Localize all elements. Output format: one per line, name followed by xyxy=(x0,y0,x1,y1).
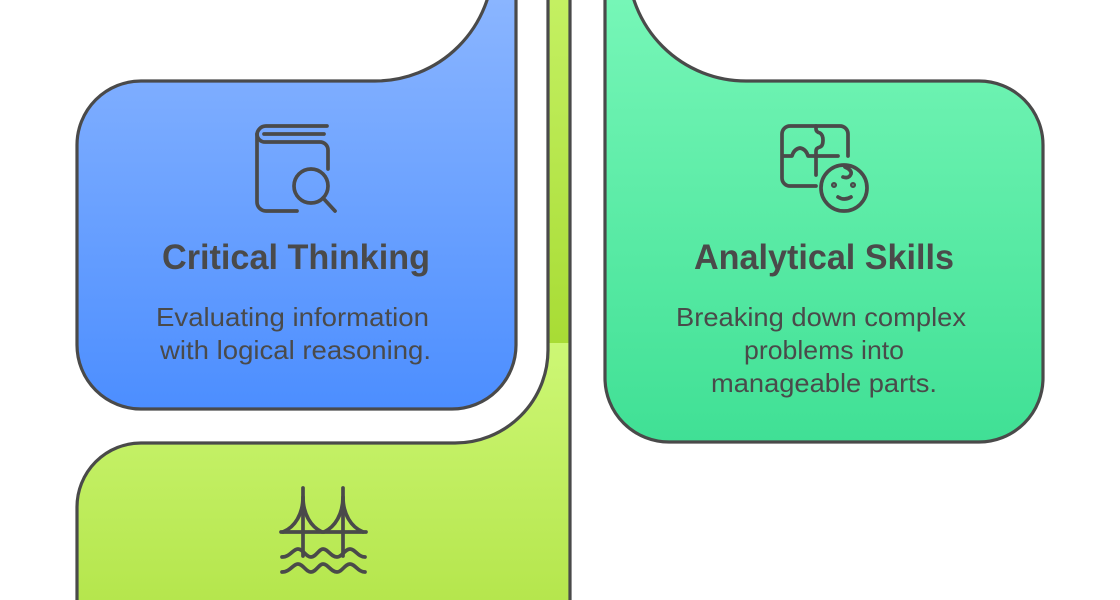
text: analytical skills description: Breaking down complex xyxy=(676,302,966,332)
panel: analytical skills card (green) xyxy=(605,0,1043,442)
text: analytical skills description: manageable parts. xyxy=(711,368,937,398)
panel: bridging gaps card (lime) xyxy=(77,0,570,600)
text: critical thinking description: with logical reasoning. xyxy=(159,335,431,365)
text: analytical skills description: problems into xyxy=(744,335,904,365)
text: critical thinking description: Evaluating information xyxy=(156,302,429,332)
heading: critical thinking: Critical Thinking xyxy=(162,238,430,277)
text: critical thinking description xyxy=(156,302,431,365)
icon: book with magnifier xyxy=(257,126,335,211)
icon: puzzle with baby face xyxy=(782,126,867,211)
heading: analytical skills: Analytical Skills xyxy=(694,238,954,277)
panel: critical thinking card (blue) xyxy=(77,0,516,409)
icon: bridge over water xyxy=(281,488,366,572)
text: analytical skills description xyxy=(676,302,966,398)
